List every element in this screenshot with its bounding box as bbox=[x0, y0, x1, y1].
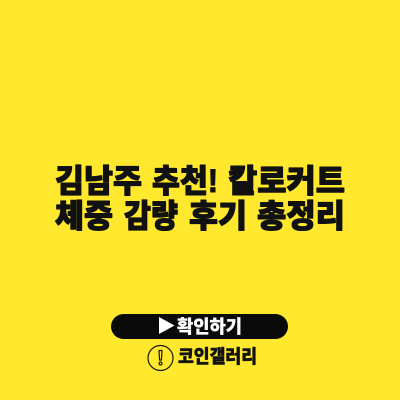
title bbox=[55, 163, 345, 234]
button: confirm bbox=[111, 314, 288, 339]
title line 2: 체중 bbox=[55, 198, 113, 234]
title line 2: 총정리 bbox=[257, 198, 345, 234]
icon: exclamation circle bbox=[148, 346, 173, 370]
brand name: 코인갤러리 bbox=[178, 346, 257, 367]
title line 1 bbox=[55, 163, 345, 199]
button label: 확인하기 bbox=[177, 316, 242, 337]
icon: play triangle bbox=[159, 317, 174, 334]
title line 2: 후기 bbox=[189, 198, 247, 234]
title line 1: 칼로커트 bbox=[228, 163, 345, 199]
title line 1: 추천! bbox=[152, 163, 218, 199]
title line 1: 김남주 bbox=[55, 163, 142, 199]
brand logo bbox=[148, 346, 257, 370]
title line 2: 감량 bbox=[124, 198, 178, 234]
title line 2 bbox=[55, 198, 345, 234]
button background bbox=[111, 314, 288, 339]
